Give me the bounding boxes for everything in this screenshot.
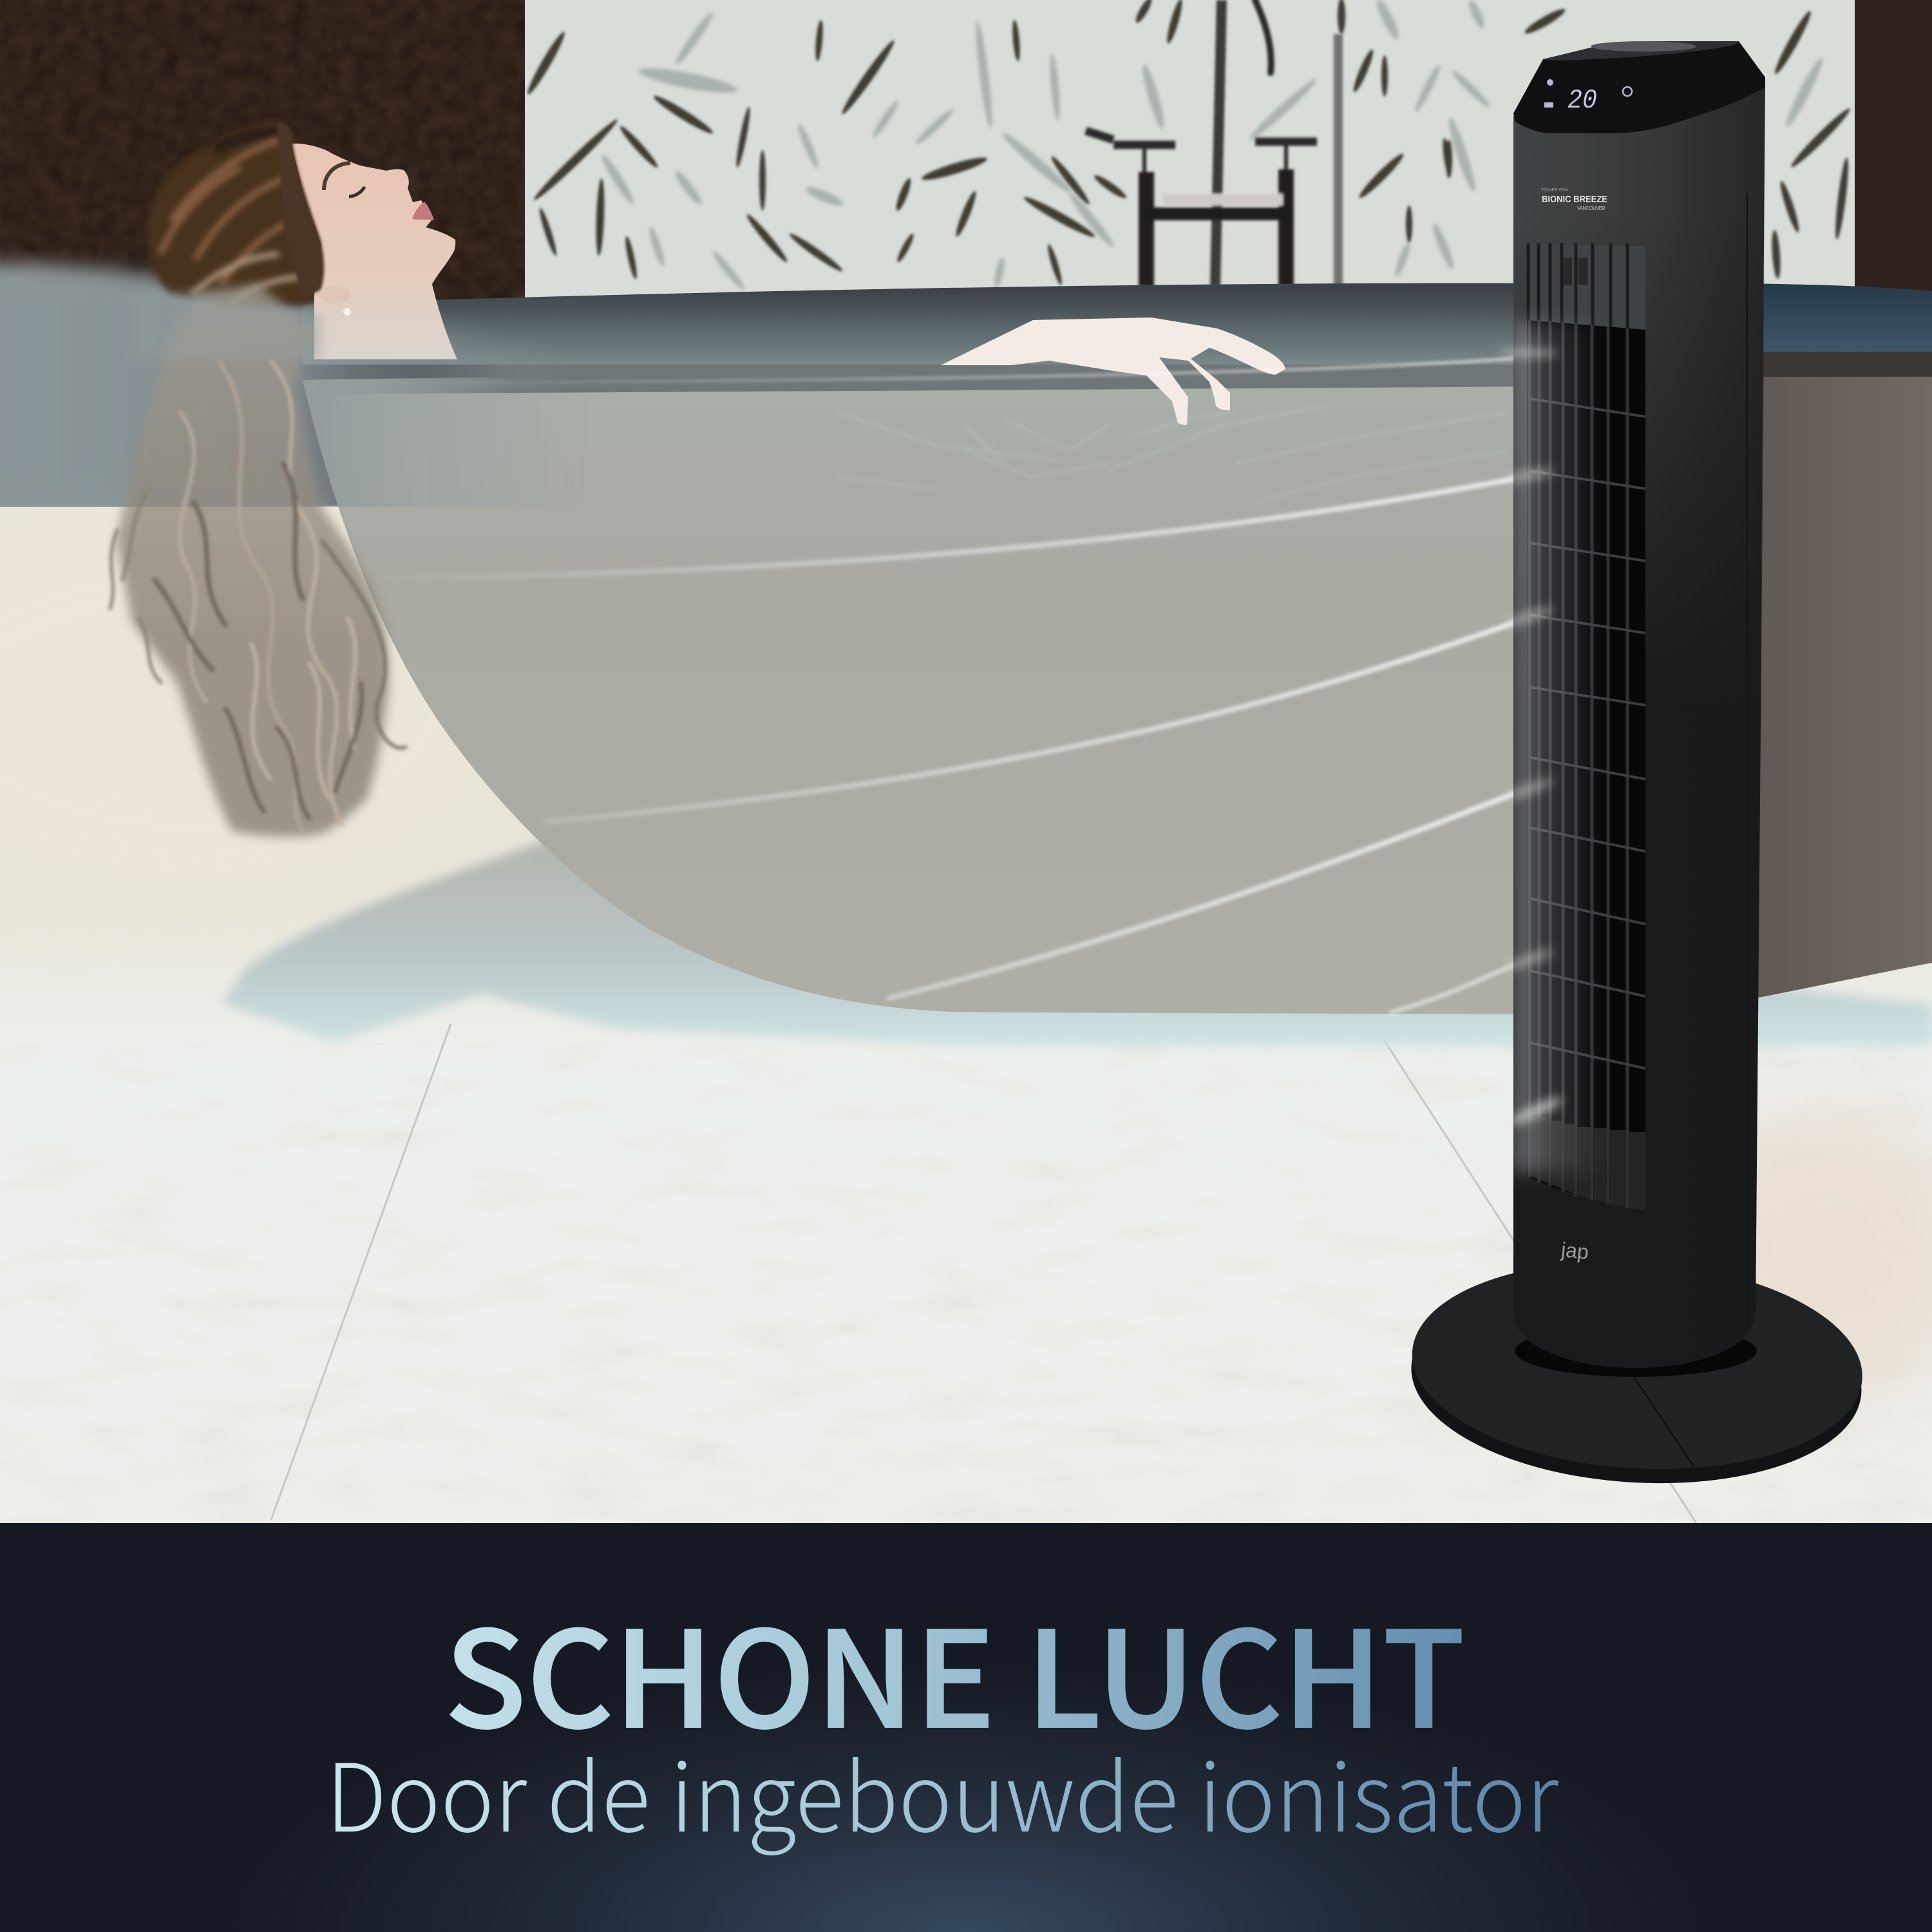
- ear: [319, 286, 350, 304]
- woman: [110, 121, 457, 837]
- top buttons: [1591, 41, 1696, 52]
- air highlights at fan: [1501, 349, 1564, 1128]
- tub lip: [303, 365, 1546, 394]
- bamboo wallpaper: [524, 0, 1858, 303]
- tub crocodile texture: [837, 406, 1507, 502]
- lower body shade: [1513, 213, 1765, 1368]
- bath faucet: [1086, 0, 1338, 287]
- cross bars: [1530, 399, 1645, 1068]
- top surface: [1543, 41, 1739, 61]
- vertical slat lines: [1530, 320, 1627, 1208]
- bathtub: [303, 283, 1932, 1014]
- top cap: [1513, 41, 1765, 133]
- display icons: [1544, 79, 1632, 108]
- tub rim back: [303, 283, 1546, 365]
- brown wall right: [1855, 0, 1932, 303]
- hairline: [277, 122, 324, 299]
- base: [1405, 1249, 1868, 1496]
- subtitle: Door de ingebouwde ionisator: [326, 1723, 1559, 1859]
- model label: VANCOUVER: [1577, 205, 1605, 211]
- title: SCHONE LUCHT: [444, 1574, 1465, 1766]
- eyebrow: [324, 163, 350, 190]
- vent dots: [1563, 258, 1587, 285]
- model label: TOWER FAN: [1541, 188, 1567, 193]
- model label: BIONIC BREEZE: [1542, 194, 1607, 205]
- base contact shadow: [1515, 1325, 1757, 1377]
- tub bowl: [303, 376, 1533, 1014]
- floor tile joints: [271, 1011, 1696, 1523]
- bottom panel: [0, 1523, 1932, 1932]
- hair top: [147, 121, 321, 308]
- dark leaves: [524, 0, 1853, 286]
- body: [1513, 84, 1765, 1368]
- brand logo: jap: [1560, 1238, 1590, 1264]
- face and neck: [291, 144, 457, 359]
- veil across hair root: [129, 291, 322, 361]
- floor shadow under tub: [222, 837, 1932, 1046]
- lips: [412, 202, 434, 220]
- mist on fan front: [1513, 313, 1591, 1182]
- upper slat panels: [1527, 243, 1645, 330]
- lower slat blocks: [1531, 1117, 1645, 1210]
- tower fan: [1405, 41, 1868, 1496]
- closed eye: [349, 187, 365, 196]
- seam: [1747, 193, 1748, 1327]
- tub right side: [1739, 377, 1932, 1001]
- photo scene: bathroom: [0, 0, 1932, 1523]
- hair long: [110, 283, 406, 837]
- panel glow: [0, 1523, 1932, 1932]
- grille: [1527, 243, 1645, 1210]
- floor marble veining: [0, 515, 1932, 1523]
- arm and hand on rim: [941, 317, 1285, 425]
- pale leaves: [598, 0, 1826, 292]
- dark brown wall left: [0, 0, 531, 303]
- floor: [0, 506, 1932, 1523]
- mist veil left: [0, 250, 496, 507]
- display temperature: 20: [1567, 85, 1597, 116]
- earring: [343, 308, 351, 316]
- model label: [1541, 188, 1607, 211]
- air stream lines: [303, 358, 1526, 1012]
